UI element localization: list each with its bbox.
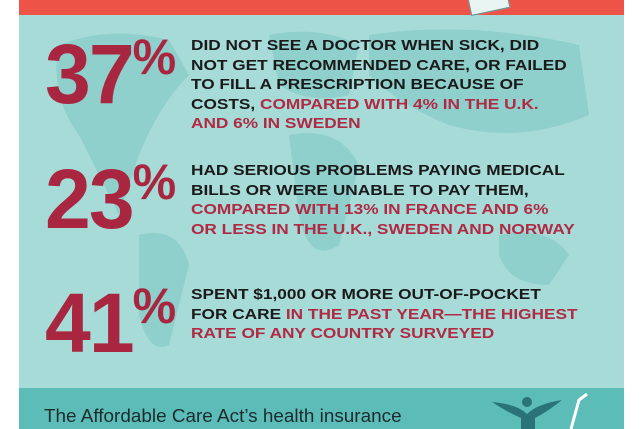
icon: caduceus cart (492, 392, 588, 429)
text 23: HAD SERIOUS PROBLEMS PAYING MEDICAL (191, 162, 565, 179)
text 41: RATE OF ANY COUNTRY SURVEYED (191, 325, 494, 342)
icon: envelope (468, 0, 510, 16)
text 23 (191, 162, 575, 238)
number 23: 23% (45, 152, 176, 246)
text 41 (191, 286, 578, 342)
text 41: SPENT $1,000 OR MORE OUT-OF-POCKET (191, 286, 541, 303)
text 37: DID NOT SEE A DOCTOR WHEN SICK, DID (191, 37, 539, 54)
stat: 41% (45, 276, 578, 370)
text 37: TO FILL A PRESCRIPTION BECAUSE OF (191, 76, 524, 93)
text 23: COMPARED WITH 13% IN FRANCE AND 6% (191, 201, 548, 218)
number 37: 37% (45, 27, 176, 121)
bottom band (19, 388, 624, 429)
text 37 (191, 37, 567, 132)
text 23: OR LESS IN THE U.K., SWEDEN AND NORWAY (191, 220, 575, 238)
text 37: COSTS, COMPARED WITH 4% IN THE U.K. (191, 96, 539, 112)
text 41: FOR CARE IN THE PAST YEAR—THE HIGHEST (191, 306, 578, 322)
text 37: NOT GET RECOMMENDED CARE, OR FAILED (191, 56, 567, 74)
text 37: AND 6% IN SWEDEN (191, 115, 361, 132)
top red banner (19, 0, 624, 15)
text 23: BILLS OR WERE UNABLE TO PAY THEM, (191, 182, 529, 198)
bottom text: The Affordable Care Act’s health insurance (44, 406, 402, 426)
stat: 23% (45, 152, 575, 246)
stat: 37% (45, 27, 567, 132)
number 41: 41% (45, 276, 176, 370)
